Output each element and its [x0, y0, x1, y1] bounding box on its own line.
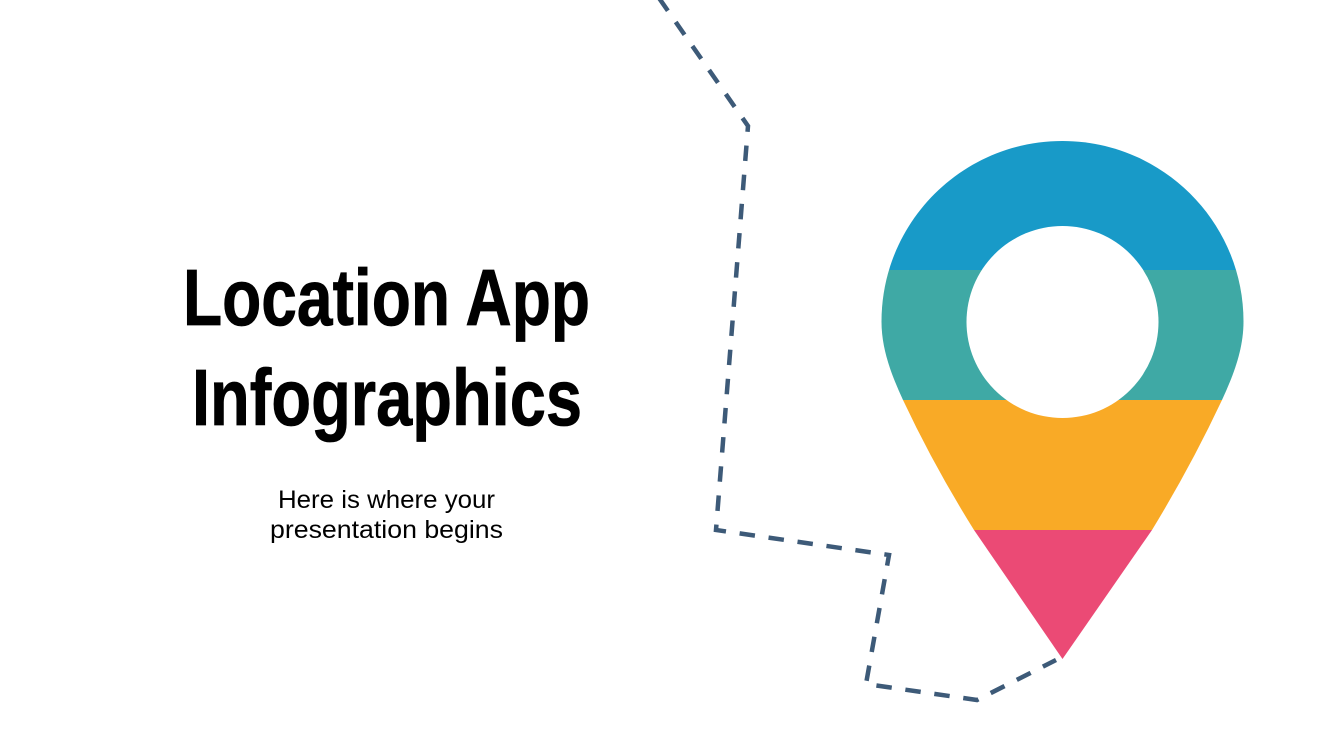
pin hole	[966, 226, 1158, 418]
pin band: pink	[974, 530, 1152, 659]
subtitle	[270, 486, 503, 544]
pin band: teal	[870, 270, 1255, 400]
title	[183, 253, 590, 442]
pin band: blue	[889, 141, 1236, 270]
title: Infographics	[192, 353, 582, 442]
subtitle: presentation begins	[270, 516, 503, 544]
dashed route line	[659, 0, 1056, 700]
title: Location App	[183, 253, 590, 342]
pin band: orange	[903, 400, 1222, 530]
icon: location pin	[870, 130, 1255, 665]
subtitle: Here is where your	[278, 486, 495, 514]
